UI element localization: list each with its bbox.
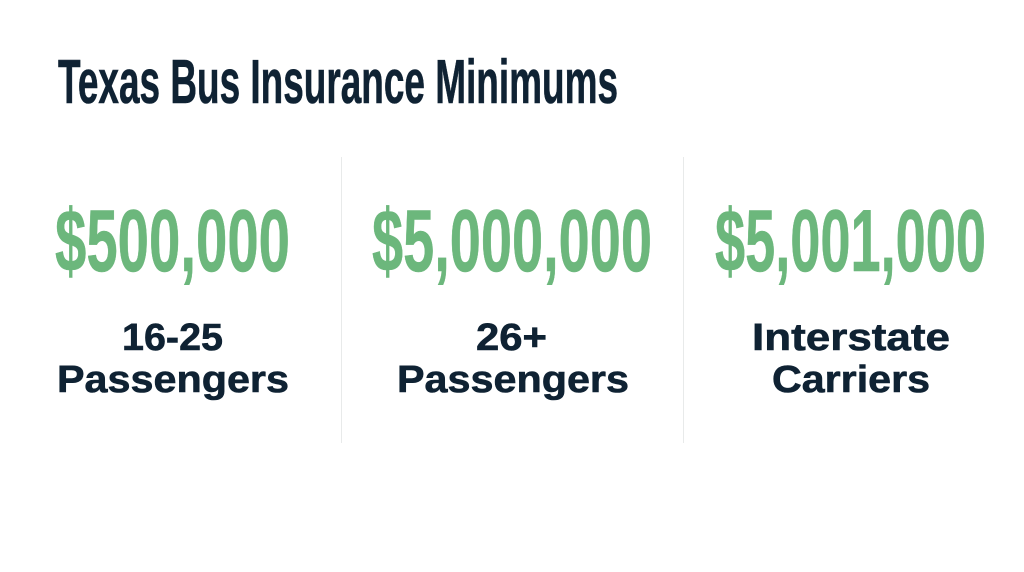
- label: 26+ Passengers: 26+: [476, 317, 547, 359]
- panel: 26+ passengers: [372, 191, 652, 401]
- label: Interstate Carriers: Carriers: [772, 359, 930, 401]
- label: 16-25 Passengers: 16-25: [122, 317, 223, 359]
- label: 26+ Passengers: [397, 317, 629, 401]
- title: Texas Bus Insurance Minimums: [58, 48, 618, 117]
- panel: 16-25 passengers: [55, 191, 290, 401]
- panel: interstate carriers: [715, 191, 986, 401]
- label: Interstate Carriers: [752, 317, 950, 401]
- label: Interstate Carriers: Interstate: [752, 317, 950, 359]
- label: 16-25 Passengers: Passengers: [57, 359, 289, 401]
- amount: $500,000: $500,000: [55, 191, 290, 290]
- amount: $5,000,000: $5,000,000: [372, 191, 652, 290]
- label: 26+ Passengers: Passengers: [397, 359, 629, 401]
- label: 16-25 Passengers: [57, 317, 289, 401]
